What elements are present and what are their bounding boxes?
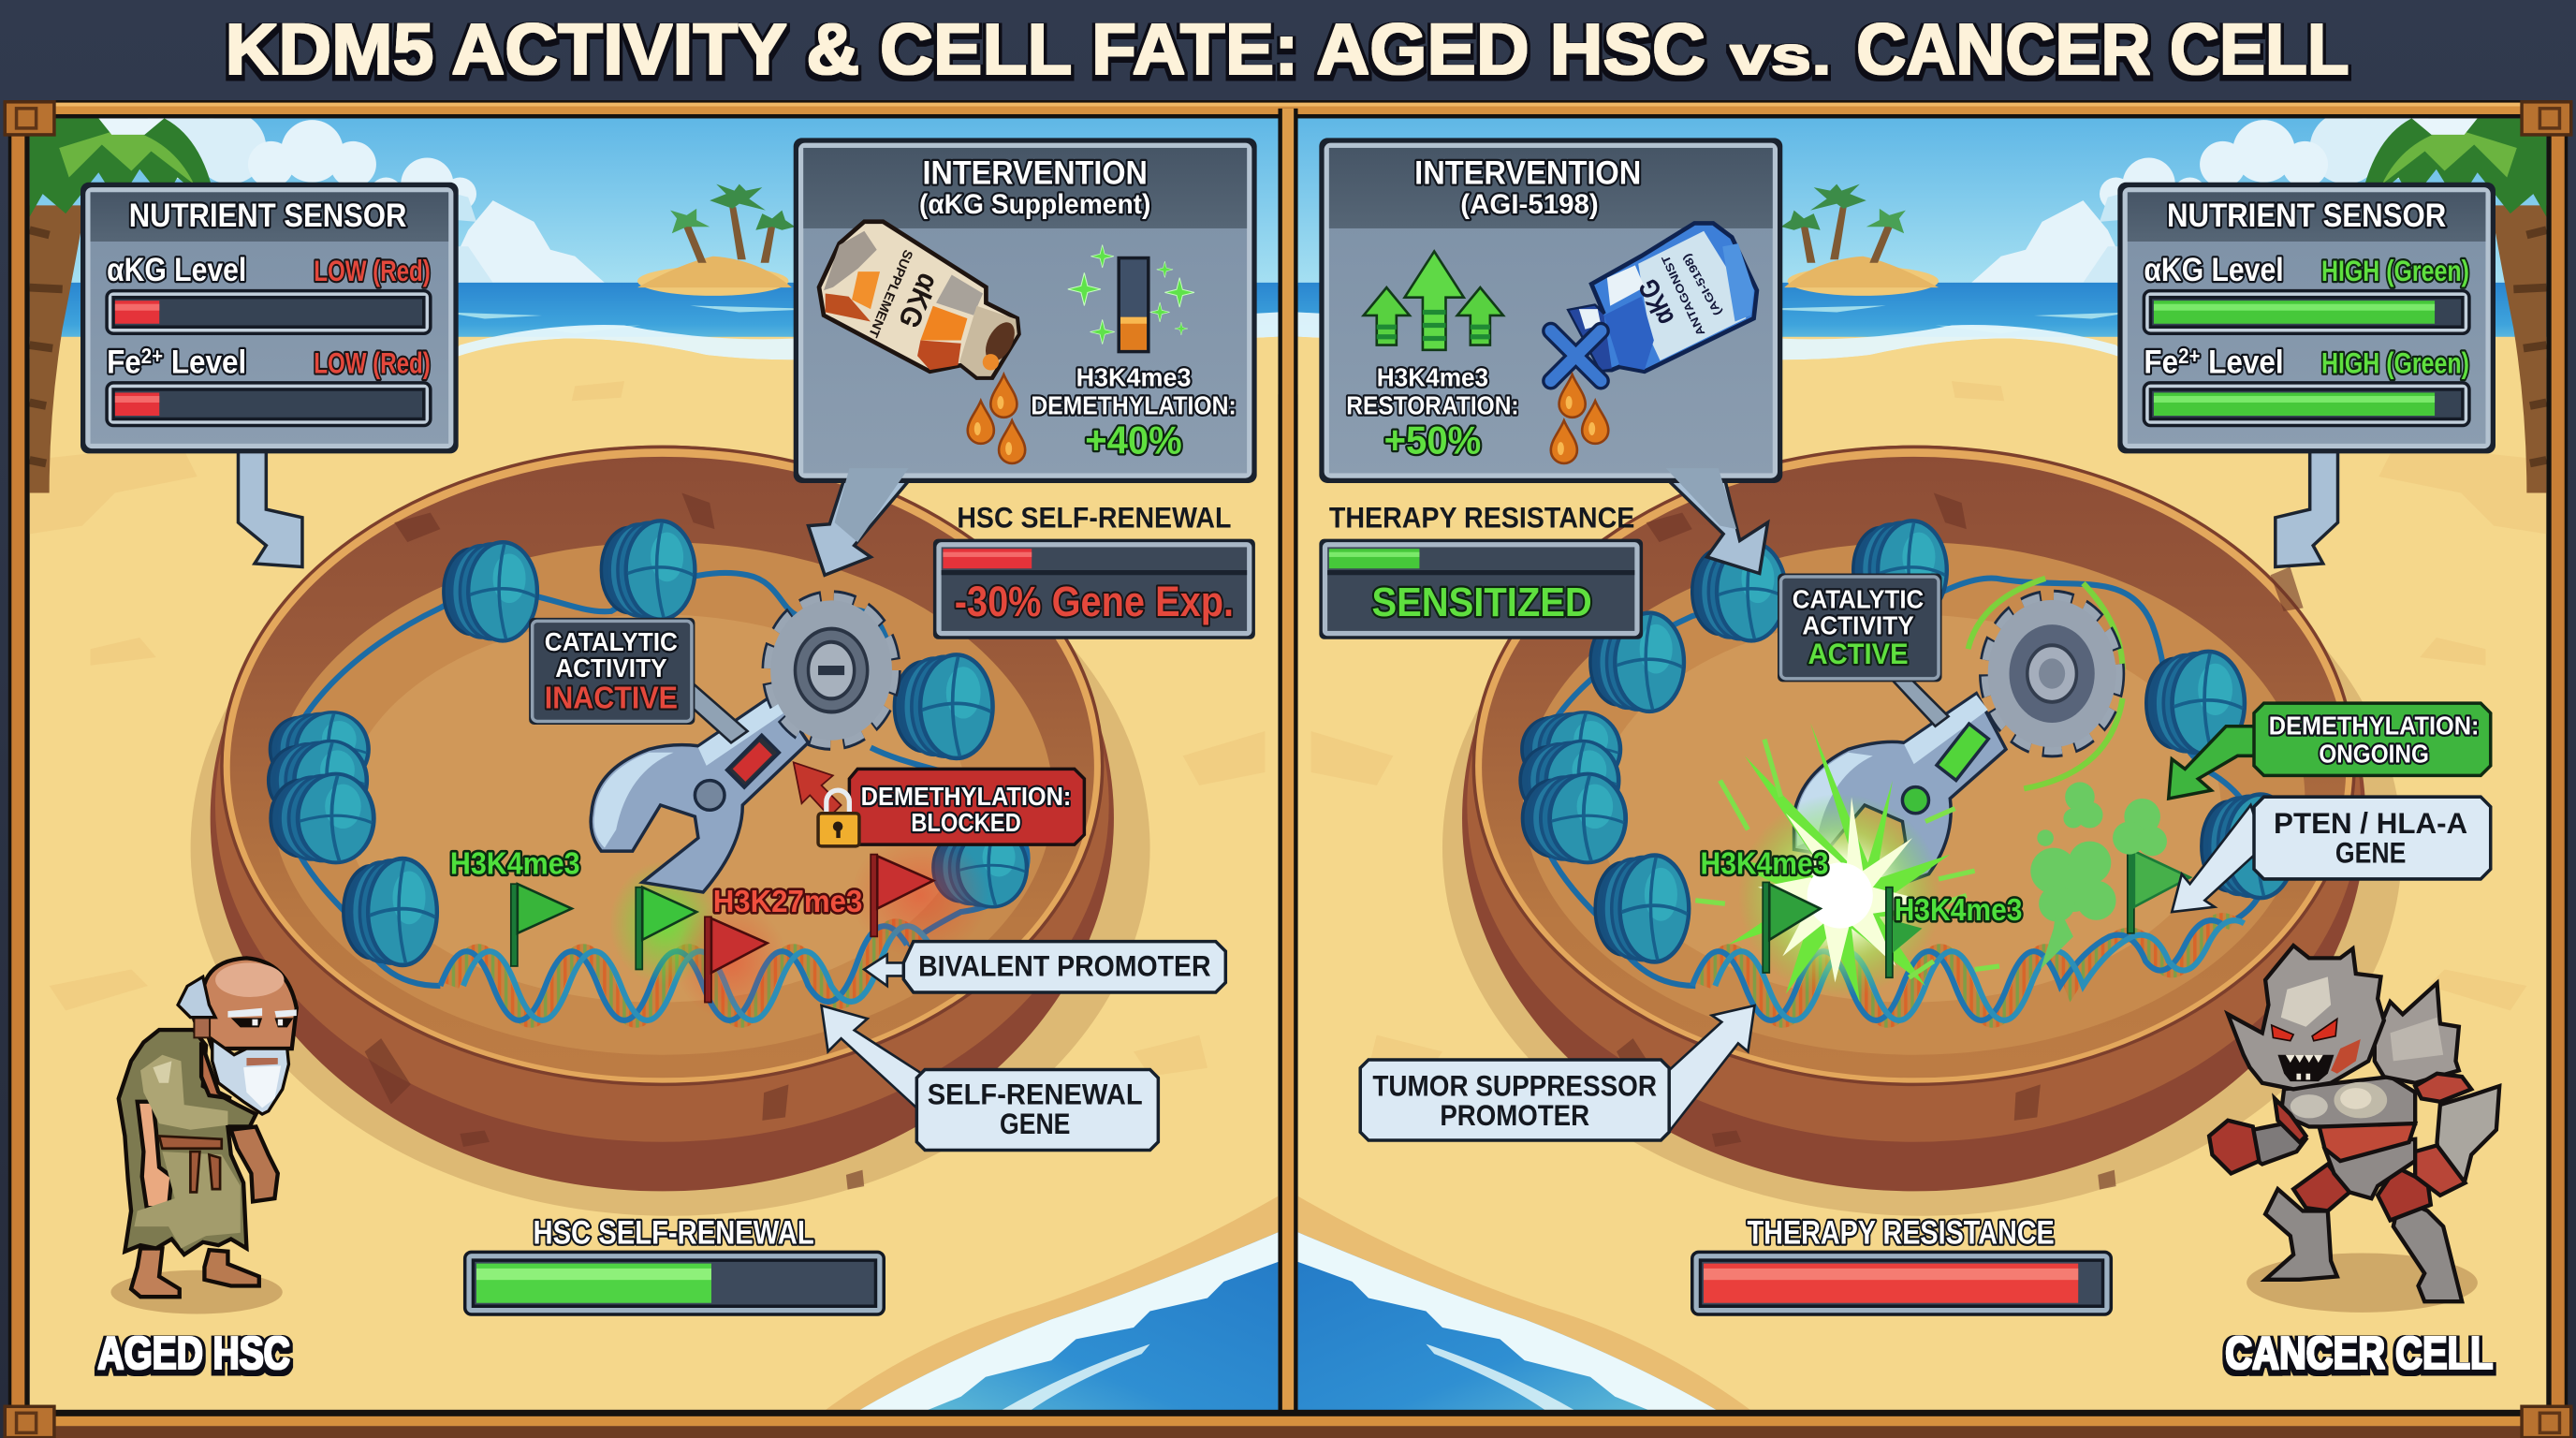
title: vs. — [1730, 26, 1832, 86]
nucleosome 7 — [894, 654, 993, 758]
flank — [2275, 1098, 2305, 1142]
panel: right intervention: (AGI-5198) — [1460, 189, 1599, 220]
nucleosome 4 — [1522, 712, 1620, 786]
row: aKG level — [2144, 252, 2469, 333]
flag: H3K4me3 centre — [1886, 888, 1922, 977]
nucleosome 1 — [1853, 521, 1947, 620]
callout: bivalent promoter — [864, 942, 1225, 992]
panel: left nutrient sensor: NUTRIENT SENSOR — [129, 198, 406, 234]
panel: therapy resistance readout — [1319, 500, 1643, 639]
callout: PTEN / HLA-A gene: GENE — [2335, 835, 2406, 869]
row: Fe level: LOW (Red) — [314, 345, 431, 379]
nucleosome 6 — [344, 858, 437, 965]
callout: demethylation ongoing — [2169, 703, 2491, 799]
callout: catalytic activity inactive: CATALYTIC — [545, 627, 678, 656]
panel: left intervention: INTERVENTION — [922, 155, 1148, 192]
character: cancer cell monster — [2209, 946, 2499, 1313]
label: aged HSC: AGED HSC — [97, 1328, 290, 1379]
panel: right intervention — [1319, 138, 1782, 574]
panel: HSC self-renewal readout: HSC SELF-RENEWAL — [957, 500, 1231, 534]
callout: demethylation ongoing: ONGOING — [2319, 739, 2429, 768]
row: Fe level: 2+ — [2178, 344, 2200, 368]
flag: H3K4me3 left — [1763, 882, 1821, 973]
nucleosome 5 — [1520, 741, 1618, 820]
panel: HSC self-renewal readout — [933, 500, 1255, 639]
row: Fe level: Level — [163, 344, 246, 380]
panel: right intervention: +50% — [1384, 418, 1481, 462]
title — [225, 9, 2349, 90]
gear: inactive — [770, 600, 892, 741]
nucleosome 1 — [444, 542, 537, 640]
label: H3K4me3 right: H3K4me3 — [1895, 893, 2023, 928]
callout: PTEN / HLA-A gene — [2172, 797, 2491, 912]
flag: H3K4me3 one — [511, 884, 572, 966]
green demethylation clouds — [2030, 782, 2167, 969]
arm right — [231, 1126, 278, 1201]
arrow: right sensor to dish — [2276, 447, 2338, 566]
icon: up arrows — [1364, 252, 1503, 350]
callout: demethylation ongoing: DEMETHYLATION: — [2269, 711, 2479, 740]
head — [2228, 946, 2384, 1089]
callout: catalytic activity active: ACTIVE — [1808, 637, 1909, 670]
title: CANCER CELL — [1856, 9, 2349, 90]
background: right beach scene — [1298, 100, 2546, 1421]
nucleosome 5 — [271, 774, 373, 862]
callout: tumor suppressor promoter — [1360, 1005, 1754, 1140]
label: H3K4me3 left: H3K4me3 — [1701, 847, 1828, 882]
row: aKG level: αKG Level — [107, 252, 246, 288]
panel: left intervention — [794, 138, 1257, 575]
row: Fe level — [2144, 344, 2469, 426]
robe shading — [140, 1055, 227, 1130]
row: Fe level: HIGH (Green) — [2321, 345, 2469, 379]
nucleosome 6 — [1523, 774, 1626, 862]
row: aKG level — [107, 252, 431, 333]
panel: left chromatin — [269, 521, 1225, 1151]
row: aKG level: αKG Level — [2144, 252, 2284, 288]
label: cancer cell: CANCER CELL — [2225, 1328, 2493, 1379]
arrow: left sensor to dish — [238, 447, 302, 566]
icon: drops — [968, 374, 1025, 463]
callout: catalytic activity inactive: INACTIVE — [545, 681, 678, 715]
callout: catalytic activity active — [1778, 574, 1949, 726]
icon: antagonist bottle: αKG — [1632, 274, 1680, 330]
callout: self-renewal gene: GENE — [1000, 1107, 1070, 1140]
beard — [212, 1039, 288, 1114]
nucleosome 3 — [271, 712, 369, 786]
DNA helix — [440, 926, 929, 1020]
flag: H3K27me3 two — [851, 833, 989, 958]
bar: therapy resistance — [1692, 1215, 2111, 1314]
callout: tumor suppressor promoter: PROMOTER — [1440, 1098, 1589, 1132]
DNA helix — [1692, 920, 2244, 1020]
legs — [131, 1248, 180, 1297]
callout: demethylation blocked: DEMETHYLATION: — [861, 782, 1071, 811]
belly — [2319, 1123, 2415, 1161]
row: Fe level: Level — [2200, 344, 2284, 380]
row: Fe level: 2+ — [141, 344, 163, 368]
icon: aKG supplement bottle: αKG — [892, 269, 946, 333]
panel: right intervention: RESTORATION: — [1346, 390, 1519, 419]
dish: right nucleus — [1442, 446, 2402, 1216]
pelvis — [2324, 1139, 2415, 1198]
panel: right intervention: H3K4me3 — [1377, 362, 1488, 391]
callout: tumor suppressor promoter: TUMOR SUPPRESSOR — [1372, 1069, 1657, 1103]
background: left beach scene — [30, 100, 1278, 1421]
callout: catalytic activity inactive — [529, 618, 748, 742]
callout: bivalent promoter: BIVALENT PROMOTER — [918, 948, 1211, 982]
panel: right intervention: INTERVENTION — [1414, 155, 1641, 192]
callout: catalytic activity inactive: ACTIVITY — [555, 653, 667, 682]
linker DNA — [1533, 579, 2267, 986]
right shoulder — [2375, 983, 2459, 1083]
nucleosome 3 — [1590, 613, 1684, 712]
icon: padlock — [818, 790, 859, 846]
chest — [2281, 1077, 2415, 1126]
head — [194, 958, 297, 1049]
left arm — [2253, 1123, 2305, 1164]
callout: demethylation blocked: BLOCKED — [911, 808, 1021, 837]
flag: H3K4me3 right — [2128, 851, 2190, 933]
icon: drops — [1551, 374, 1608, 463]
panel: left nutrient sensor — [80, 183, 459, 453]
dish: left nucleus — [191, 446, 1150, 1216]
icon: antagonist bottle — [1570, 223, 1757, 372]
panel: left intervention: H3K4me3 — [1076, 362, 1191, 391]
bar: HSC self-renewal — [465, 1215, 884, 1314]
right forearm — [2437, 1086, 2499, 1180]
row: aKG level: HIGH (Green) — [2321, 254, 2469, 287]
panel: HSC self-renewal readout: -30% Gene Exp. — [955, 578, 1234, 625]
row: aKG level: LOW (Red) — [314, 254, 431, 287]
linker DNA — [282, 573, 1028, 986]
left leg — [2265, 1189, 2337, 1280]
icon: antagonist bottle: ANTAGONIST — [1659, 253, 1707, 338]
neck — [201, 1042, 231, 1098]
character: aged HSC — [110, 958, 297, 1313]
panel: right nutrient sensor — [2117, 183, 2496, 453]
icon: blue X — [1551, 330, 1601, 381]
callout: self-renewal gene — [822, 1005, 1158, 1151]
bar: HSC self-renewal: HSC SELF-RENEWAL — [534, 1215, 814, 1252]
head details — [2281, 976, 2331, 1027]
callout: demethylation blocked — [849, 769, 1084, 844]
panel: right chromatin — [1360, 521, 2491, 1140]
row: Fe level — [107, 344, 431, 426]
icon: aKG supplement bottle — [819, 222, 1020, 377]
icon: aKG supplement bottle: SUPPLEMENT — [866, 248, 916, 340]
panel: left intervention: (αKG Supplement) — [919, 189, 1150, 220]
row: Fe level: Fe — [2144, 344, 2182, 380]
icons: sparkles — [1068, 244, 1194, 345]
label: H3K27me3: H3K27me3 — [713, 885, 862, 919]
green energy burst — [1695, 723, 1999, 1003]
nucleosome 2 — [601, 521, 695, 620]
callout: PTEN / HLA-A gene: PTEN / HLA-A — [2274, 806, 2467, 840]
arm left — [138, 1102, 171, 1208]
nucleosome 8 — [2146, 652, 2245, 755]
nucleosome 8 — [933, 829, 1027, 907]
nucleosome 4 — [269, 741, 367, 820]
panel: left intervention: DEMETHYLATION: — [1031, 390, 1237, 419]
chest highlights — [2291, 1094, 2328, 1118]
nucleosome 9 — [2202, 795, 2295, 898]
flag: H3K27me3 one — [675, 902, 787, 1020]
panel: left intervention: +40% — [1085, 418, 1182, 462]
panel: therapy resistance readout: THERAPY RESISTANCE — [1329, 500, 1634, 534]
callout: catalytic activity active: ACTIVITY — [1802, 610, 1914, 639]
panel: therapy resistance readout: SENSITIZED — [1372, 580, 1592, 625]
robe — [119, 1030, 256, 1255]
nucleosome 7 — [1595, 856, 1689, 961]
callout: catalytic activity active: CATALYTIC — [1793, 584, 1924, 613]
icon: gauge — [1119, 258, 1149, 352]
label: H3K4me3: H3K4me3 — [450, 847, 580, 882]
flag: H3K4me3 two, glowing — [609, 861, 721, 986]
wrench: active — [1794, 694, 2006, 901]
bar: therapy resistance: THERAPY RESISTANCE — [1748, 1215, 2055, 1252]
panel: right nutrient sensor: NUTRIENT SENSOR — [2167, 198, 2446, 234]
title: KDM5 ACTIVITY & CELL FATE: AGED HSC — [225, 9, 1705, 90]
arrow: blocked to wrench — [794, 762, 842, 816]
row: Fe level: Fe — [107, 344, 145, 380]
belt — [159, 1136, 222, 1192]
wrench: inactive — [591, 694, 809, 892]
callout: self-renewal gene: SELF-RENEWAL — [928, 1077, 1143, 1110]
gear: active — [1969, 579, 2123, 788]
icon: antagonist bottle: (AGI-5198) — [1679, 252, 1724, 318]
right leg — [2393, 1198, 2462, 1301]
nucleosome 2 — [1692, 542, 1786, 640]
